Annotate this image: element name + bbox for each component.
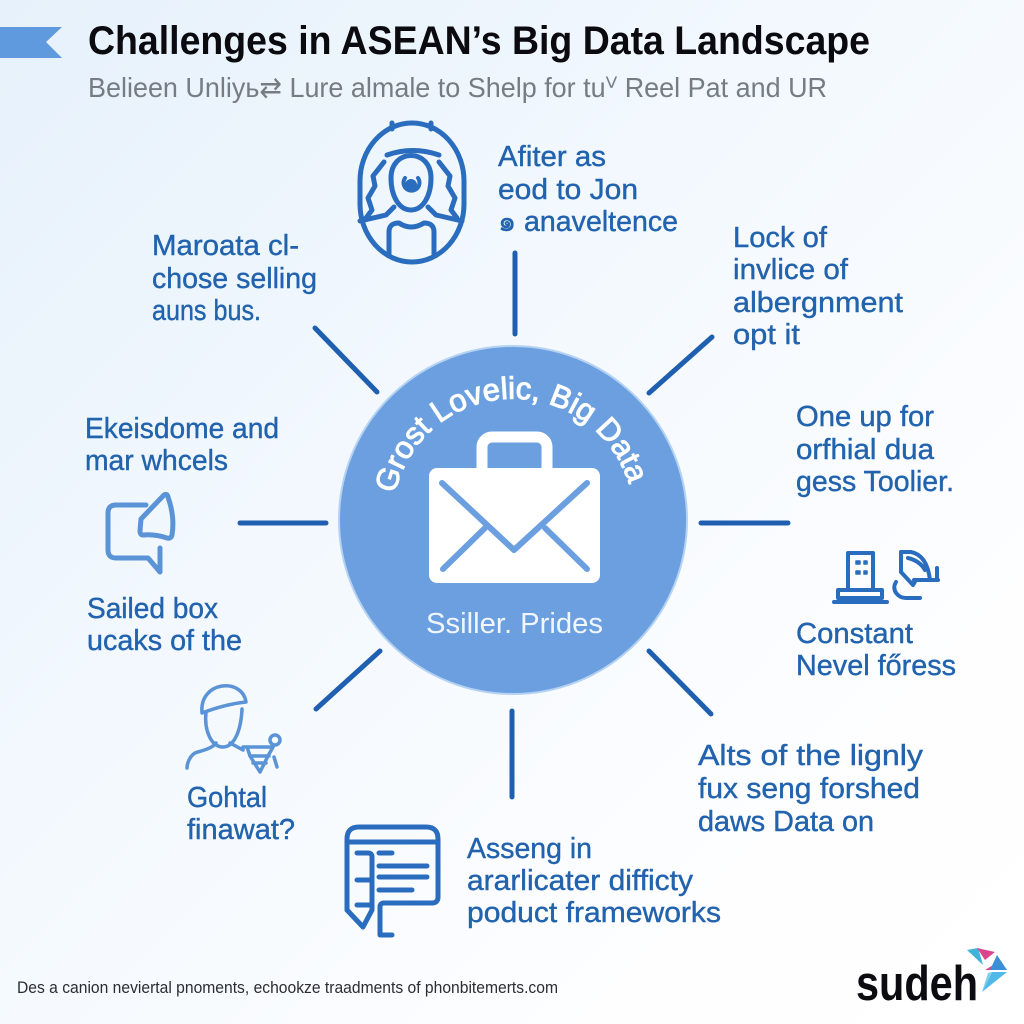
label: lower right: fux seng forshed [698,773,920,805]
label: lower right [698,740,924,838]
label: lower right: daws Data on [698,806,874,838]
label: upper right: invlice of [733,254,848,286]
label: left [85,413,279,477]
footer note: Des a canion neviertal pnoments, echookze traadments of phonbitemerts.com [17,979,558,997]
header ribbon [0,27,62,58]
label: lower left: Gohtal [187,782,267,814]
label: lower right icon text: Nevel főress [796,650,956,682]
label: lower left: finawat? [187,814,295,846]
label: lower left [187,782,295,846]
label: top: ๑ anaveltence [498,206,678,238]
label: lower right: Alts of the lignly [698,740,924,772]
label: right: gess Toolier. [796,466,954,498]
label: lower right icon text [796,618,956,682]
label: upper right: albergnment [733,287,903,319]
central hub [338,345,688,695]
label: bottom: ararlicater difficty [467,865,694,897]
icon: building and hand [834,552,938,602]
label: left: Ekeisdome and [85,413,279,445]
subtitle: Belieen Unliyь⇄ Lure almale to Shelp for tuⱽ Reel Pat and UR [88,72,827,103]
logo wordmark: sudeh [856,957,978,1011]
label: left: mar whcels [85,445,228,477]
label: upper right [733,222,903,351]
label: left lower [87,593,242,657]
icon: person with cap [187,686,280,772]
icon: briefcase envelope [429,437,600,583]
label: upper left: auns bus. [152,295,261,327]
label: right [796,401,954,498]
hub caption: Ssiller. Prides [426,608,603,640]
label: upper right: Lock of [733,222,827,254]
label: upper left: Maroata cl- [152,230,299,262]
label: left lower: Sailed box [87,593,218,625]
label: upper left: chose selling [152,263,317,295]
label: top: eod to Jon [498,174,638,206]
title: Challenges in ASEAN’s Big Data Landscape [88,19,870,63]
icon: speech bubble megaphone [108,494,173,572]
label: right: One up for [796,401,935,433]
label: left lower: ucaks of the [87,625,242,657]
label: upper left [152,230,317,327]
label: lower right icon text: Constant [796,618,913,650]
label: bottom: Asseng in [467,833,592,865]
label: top [498,141,678,238]
hub curved heading: Grost Lovelic, Big Data [376,376,643,490]
icon: face in oval [360,123,464,262]
label: top: Afiter as [498,141,606,173]
logo [856,948,1007,1011]
icon: document with pencil [347,827,438,935]
label: bottom: poduct frameworks [467,897,721,929]
label: right: orfhial dua [796,434,934,466]
logo mark [967,948,1007,992]
spokes [240,253,788,797]
label: upper right: opt it [733,319,800,351]
label: bottom [467,833,721,929]
